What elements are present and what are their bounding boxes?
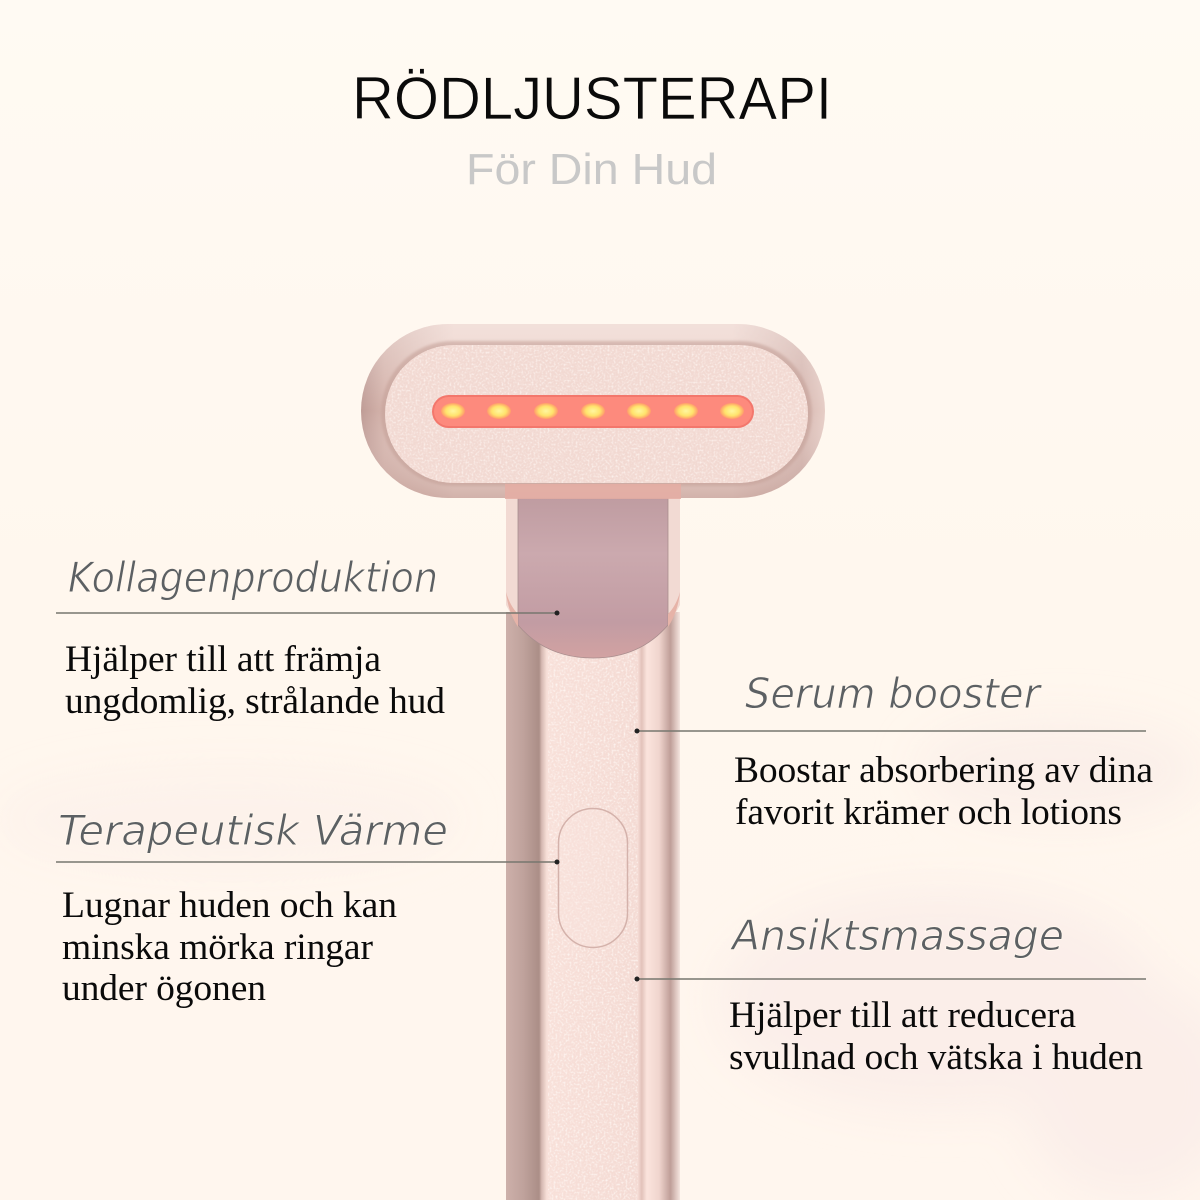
callout: Terapeutisk Värme: Lugnar huden och kan <box>62 885 397 926</box>
callout: Terapeutisk Värme <box>56 806 560 1009</box>
subtitle: För Din Hud <box>466 145 717 194</box>
device: LED wand <box>361 324 825 1200</box>
salmon edges <box>506 592 680 627</box>
rose insert <box>518 498 668 658</box>
callout: Kollagenproduktion: ungdomlig, strålande hud <box>65 681 445 722</box>
callout: Ansiktsmassage: Ansiktsmassage <box>729 911 1064 960</box>
callout: Kollagenproduktion: Hjälper till att främja <box>65 639 381 680</box>
callout: Ansiktsmassage: svullnad och vätska i huden <box>729 1037 1143 1078</box>
callout: Kollagenproduktion <box>56 553 560 722</box>
wand neck <box>506 490 680 640</box>
wand head <box>361 324 825 499</box>
callout: Terapeutisk Värme: under ögonen <box>62 968 266 1009</box>
callout: Serum booster: Serum booster <box>745 669 1043 718</box>
callout: Ansiktsmassage: Hjälper till att reducera <box>729 995 1076 1036</box>
callout: Terapeutisk Värme: Terapeutisk Värme <box>58 806 448 855</box>
callout: Serum booster: favorit krämer och lotions <box>735 792 1122 833</box>
LED strip <box>432 395 754 428</box>
title: RÖDLJUSTERAPI <box>352 65 832 132</box>
callout: Terapeutisk Värme: minska mörka ringar <box>62 927 374 968</box>
callout: Kollagenproduktion: Kollagenproduktion <box>68 553 438 602</box>
wand shaft <box>506 612 680 1200</box>
callout: Serum booster: Boostar absorbering av dina <box>734 750 1153 791</box>
power button <box>558 808 628 948</box>
callout: Ansiktsmassage <box>634 911 1146 1078</box>
callout: Serum booster <box>634 669 1153 833</box>
